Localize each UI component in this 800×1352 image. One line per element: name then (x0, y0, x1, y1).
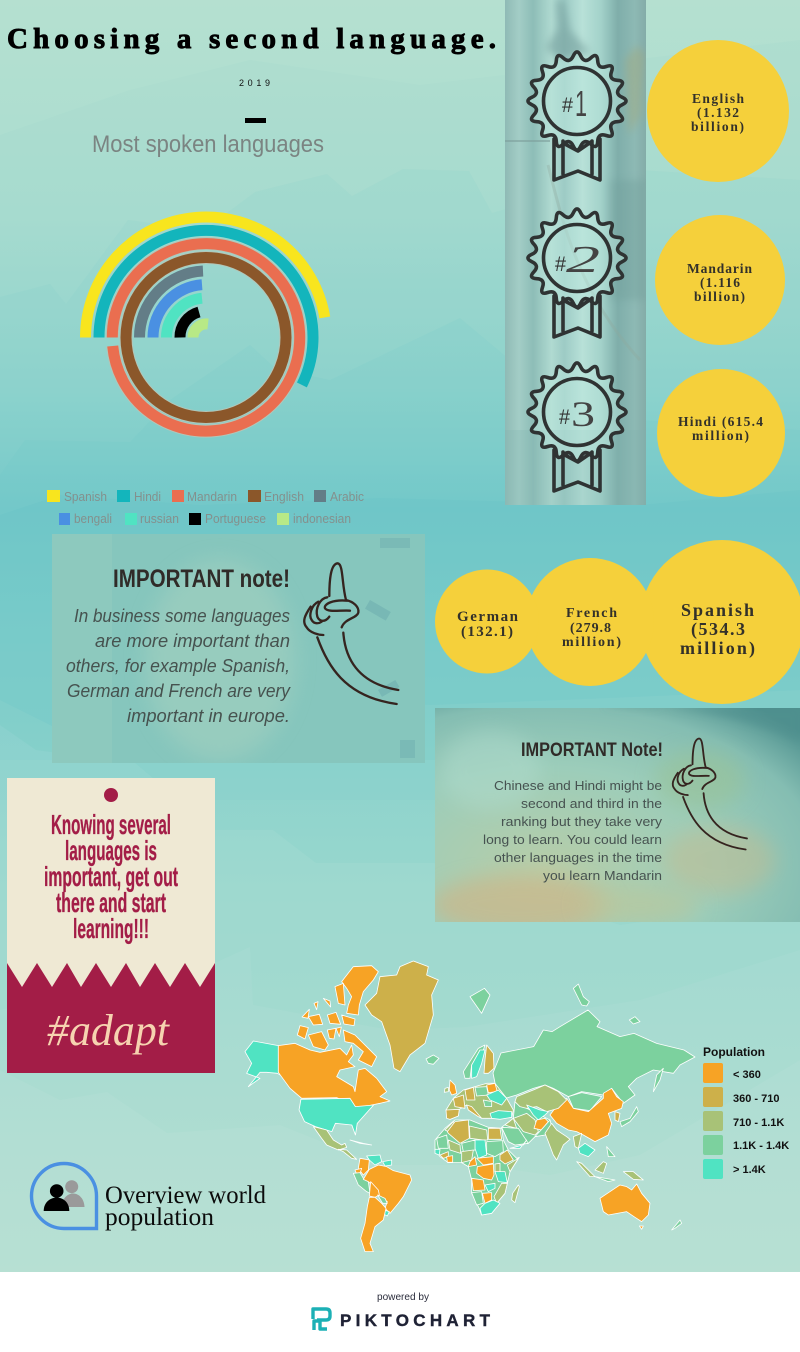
circle: Spanish: (534.3 (691, 619, 745, 640)
chart legend (47, 489, 364, 526)
circle: Spanish: Spanish (681, 600, 754, 620)
rank badge 2: # (555, 253, 566, 276)
rank badge 2: 2 (566, 239, 600, 281)
title: Choosing a second language. (7, 23, 496, 55)
circle: Spanish: million) (680, 638, 755, 659)
note body: long to learn. You could learn (483, 833, 662, 847)
poster message (44, 809, 178, 944)
icon: people in speech drop (32, 1164, 97, 1228)
note body: second and third in the (521, 797, 662, 811)
rank badge 1: # (562, 94, 573, 117)
usa and svalbard (299, 988, 490, 1135)
year: 2019 (239, 78, 270, 88)
circle: German: (132.1) (461, 624, 513, 640)
chart legend: russian (140, 511, 179, 526)
note body: German and French are very (67, 681, 291, 701)
note body: other languages in the time (494, 851, 662, 865)
circle: Mandarin: (1.116 (700, 275, 740, 290)
chart legend: Portuguese (205, 511, 266, 526)
panel: business note (52, 534, 425, 763)
icon: pointing hand (304, 563, 398, 704)
circle: Mandarin (655, 215, 785, 345)
eurasia and oceania (493, 984, 695, 1230)
circle: English: (1.132 (697, 105, 739, 120)
latin america (313, 1127, 412, 1252)
note body: In business some languages (74, 606, 290, 626)
chart legend: Hindi (134, 489, 161, 504)
map legend: Population (703, 1045, 765, 1059)
circle: French (526, 558, 654, 686)
chart legend: Mandarin (187, 489, 237, 504)
footer: powered by (377, 1292, 429, 1303)
chart legend: bengali (74, 511, 112, 526)
map legend: < 360 (733, 1069, 761, 1081)
circle: English: billion) (691, 119, 744, 134)
circle: Spanish (640, 540, 800, 704)
dash (245, 118, 266, 123)
circle: Mandarin: Mandarin (687, 261, 752, 276)
note body: others, for example Spanish, (66, 656, 290, 676)
icon: pointing hand small (673, 739, 747, 850)
note body: you learn Mandarin (543, 869, 662, 883)
poster message: languages is (65, 835, 157, 866)
poster message: Knowing several (51, 809, 171, 840)
chart legend: English (264, 489, 304, 504)
rank badge 3: # (559, 406, 570, 429)
note heading: IMPORTANT note! (113, 565, 290, 593)
note heading: IMPORTANT Note! (521, 740, 663, 761)
poster message: there and start (56, 887, 166, 918)
radial bar chart (86, 217, 325, 431)
rank badge 3: 3 (571, 394, 595, 434)
circle: German (435, 570, 539, 674)
footer (0, 1272, 800, 1352)
panel: adapt poster (7, 778, 215, 1073)
note body (66, 606, 291, 726)
rank badge 2 (528, 209, 626, 337)
map legend: 360 - 710 (733, 1093, 779, 1105)
world population map (245, 961, 695, 1252)
chart legend: Spanish (64, 489, 107, 504)
poster message: learning!!! (73, 913, 149, 944)
circle: Hindi: million) (692, 428, 749, 443)
circle: Hindi: Hindi (615.4 (678, 414, 763, 429)
map legend: > 1.4K (733, 1164, 766, 1176)
circle: English (647, 40, 789, 182)
photo strip (505, 0, 646, 505)
north america (245, 961, 439, 1110)
map legend: 1.1K - 1.4K (733, 1140, 789, 1152)
circle: French: million) (562, 635, 621, 650)
map heading (105, 1182, 266, 1231)
circle: German: German (457, 609, 519, 625)
chart legend: Arabic (330, 489, 364, 504)
circle: French: French (566, 606, 617, 621)
circle: English: English (692, 91, 744, 106)
map legend: 710 - 1.1K (733, 1117, 784, 1129)
circle: Hindi (657, 369, 785, 497)
rank badge 1: 1 (575, 83, 587, 124)
footer: PIKTOCHART (340, 1311, 491, 1330)
circle: French: (279.8 (570, 621, 611, 636)
map heading: Overview world (105, 1182, 266, 1209)
map legend (703, 1045, 789, 1179)
map heading: population (105, 1204, 215, 1231)
note body: are more important than (95, 631, 290, 651)
note body (483, 779, 663, 883)
chart heading: Most spoken languages (92, 131, 324, 158)
circle: Mandarin: billion) (694, 289, 745, 304)
chart legend: indonesian (293, 511, 351, 526)
note body: ranking but they take very (501, 815, 663, 829)
hashtag: #adapt (47, 1006, 171, 1055)
icon: piktochart logo (313, 1309, 330, 1330)
rank badge 3 (528, 363, 626, 491)
panel: globe note (430, 707, 800, 935)
poster message: important, get out (44, 861, 178, 892)
note body: Chinese and Hindi might be (494, 779, 662, 793)
europe and africa (435, 1045, 570, 1215)
rank badge 1 (528, 52, 626, 180)
note body: important in europe. (127, 706, 290, 726)
